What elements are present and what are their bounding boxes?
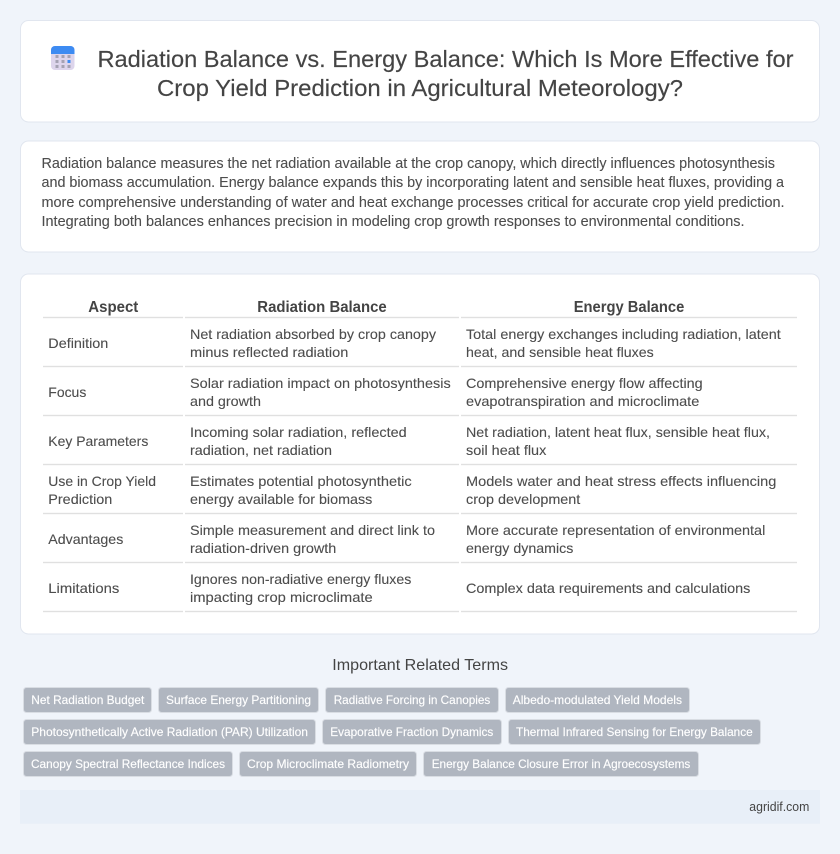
- panel: summary text: [20, 141, 820, 252]
- summary paragraph: more comprehensive understanding of water and heat exchange processes critical for accurate crop yield prediction.: [42, 195, 784, 211]
- tag: canopy spectral reflectance indices: Canopy Spectral Reflectance Indices: [31, 757, 225, 771]
- row: focus: evapotranspiration and microclimate: [466, 393, 700, 409]
- tag: surface energy partitioning: Surface Energy Partitioning: [166, 693, 311, 707]
- heading: important related terms: Important Related Terms: [332, 657, 508, 674]
- row: advantages: radiation-driven growth: [190, 540, 336, 556]
- tag: canopy spectral reflectance indices: [24, 752, 232, 776]
- panel: header: [20, 20, 820, 122]
- tag: energy balance closure error: Energy Balance Closure Error in Agroecosystems: [432, 757, 690, 771]
- row: use in crop yield prediction: [48, 473, 776, 507]
- row: limitations: Ignores non-radiative energy fluxes: [190, 571, 411, 587]
- row: definition: [48, 326, 781, 360]
- row: key parameters: [48, 424, 770, 458]
- row: use in crop yield prediction: crop development: [466, 491, 580, 507]
- row: definition: heat, and sensible heat fluxes: [466, 344, 654, 360]
- footer: agridif.com: [749, 799, 809, 814]
- row: use in crop yield prediction: Estimates potential photosynthetic: [190, 473, 412, 489]
- tag: crop microclimate radiometry: [240, 752, 416, 776]
- row: advantages: Advantages: [48, 531, 123, 547]
- row: use in crop yield prediction: Use in Crop Yield: [48, 473, 156, 489]
- row: definition: Total energy exchanges including radiation, latent: [466, 326, 781, 342]
- summary paragraph: Integrating both balances enhances precision in modeling crop growth responses to environmental conditions.: [42, 214, 744, 230]
- row: focus: and growth: [190, 393, 261, 409]
- tag: par utilization: Photosynthetically Active Radiation (PAR) Utilization: [31, 725, 308, 739]
- tag: thermal infrared sensing: [508, 720, 760, 744]
- table header row: Aspect: [88, 299, 138, 316]
- row: limitations: Complex data requirements and calculations: [466, 580, 750, 596]
- row: definition: Net radiation absorbed by crop canopy: [190, 326, 436, 342]
- row: focus: Solar radiation impact on photosynthesis: [190, 375, 451, 391]
- row: key parameters: Net radiation, latent heat flux, sensible heat flux,: [466, 424, 770, 440]
- panel: related term tags: [24, 688, 760, 776]
- tag: thermal infrared sensing: Thermal Infrared Sensing for Energy Balance: [516, 725, 753, 739]
- title: Radiation Balance vs. Energy Balance: Which Is More Effective for: [98, 46, 794, 72]
- row: definition: Definition: [48, 335, 108, 351]
- tag: net radiation budget: Net Radiation Budget: [31, 693, 145, 707]
- row: definition: minus reflected radiation: [190, 344, 348, 360]
- footer: [20, 790, 820, 824]
- title: [98, 46, 794, 101]
- tag: energy balance closure error: [424, 752, 698, 776]
- table header row: Radiation Balance: [257, 299, 387, 316]
- row: use in crop yield prediction: Prediction: [48, 491, 112, 507]
- row: focus: Comprehensive energy flow affecting: [466, 375, 703, 391]
- row: key parameters: Key Parameters: [48, 433, 148, 449]
- tag: net radiation budget: [24, 688, 152, 712]
- row: key parameters: soil heat flux: [466, 442, 546, 458]
- row: key parameters: radiation, net radiation: [190, 442, 332, 458]
- table header row: [88, 299, 685, 316]
- summary paragraph: [42, 156, 784, 230]
- row: limitations: [48, 571, 750, 605]
- row: advantages: [48, 522, 765, 556]
- row: advantages: More accurate representation of environmental: [466, 522, 765, 538]
- row: focus: [48, 375, 703, 409]
- row: advantages: energy dynamics: [466, 540, 573, 556]
- tag: evaporative fraction dynamics: [322, 720, 502, 744]
- row: limitations: impacting crop microclimate: [190, 589, 373, 605]
- row: key parameters: Incoming solar radiation, reflected: [190, 424, 407, 440]
- row: focus: Focus: [48, 384, 86, 400]
- tag: evaporative fraction dynamics: Evaporative Fraction Dynamics: [330, 725, 493, 739]
- tag: surface energy partitioning: [158, 688, 318, 712]
- row: limitations: Limitations: [48, 580, 119, 596]
- title: Crop Yield Prediction in Agricultural Meteorology?: [157, 75, 683, 101]
- summary paragraph: Radiation balance measures the net radiation available at the crop canopy, which directly influences photosynthesis: [42, 156, 775, 172]
- table header row: Energy Balance: [574, 299, 685, 316]
- panel: comparison table: [20, 274, 820, 634]
- tag: albedo-modulated yield models: Albedo-modulated Yield Models: [513, 693, 682, 707]
- tag: crop microclimate radiometry: Crop Microclimate Radiometry: [247, 757, 409, 771]
- icon: calendar: [51, 46, 74, 70]
- row: use in crop yield prediction: Models water and heat stress effects influencing: [466, 473, 776, 489]
- row: advantages: Simple measurement and direct link to: [190, 522, 435, 538]
- summary paragraph: and biomass accumulation. Energy balance expands this by incorporating latent and sensible heat fluxes, providing a: [42, 175, 784, 191]
- tag: radiative forcing in canopies: [326, 688, 498, 712]
- tag: radiative forcing in canopies: Radiative Forcing in Canopies: [334, 693, 490, 707]
- tag: par utilization: [24, 720, 316, 744]
- tag: albedo-modulated yield models: [506, 688, 690, 712]
- row: use in crop yield prediction: energy available for biomass: [190, 491, 372, 507]
